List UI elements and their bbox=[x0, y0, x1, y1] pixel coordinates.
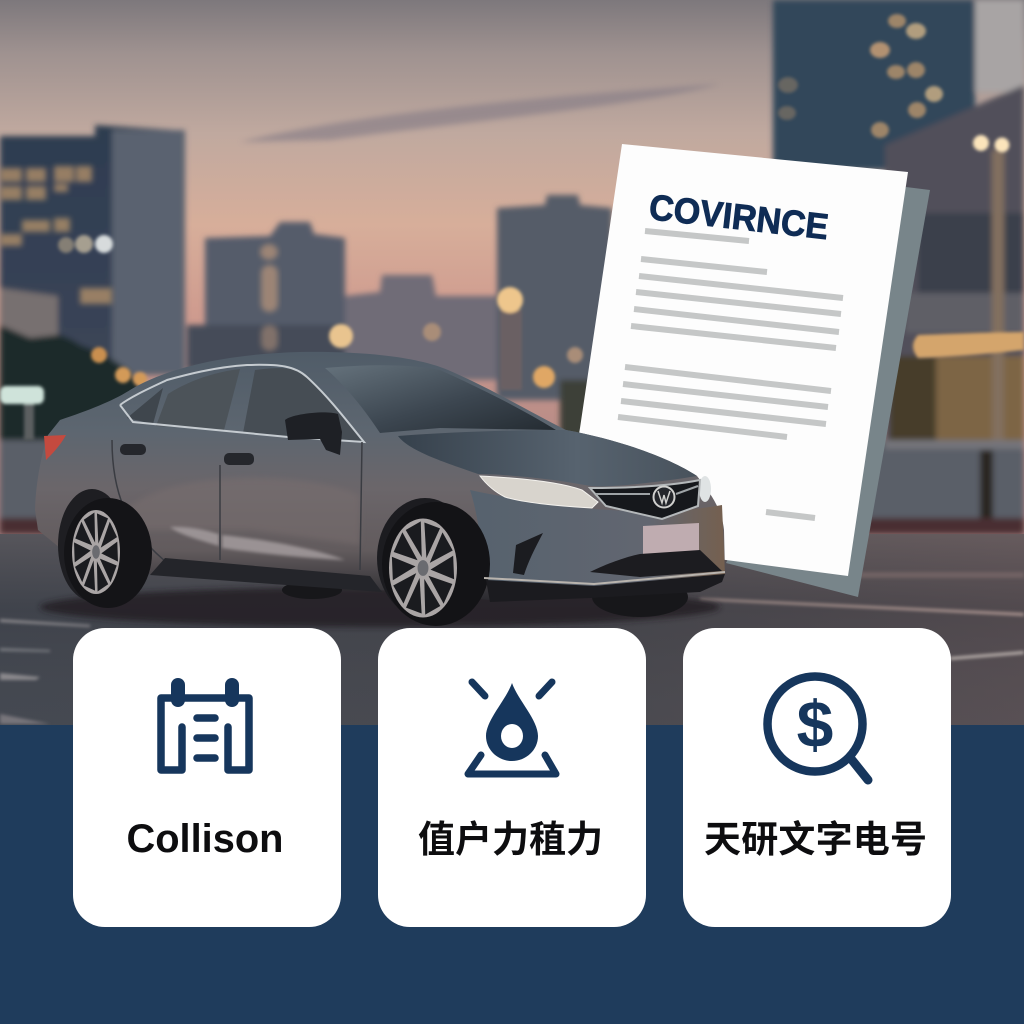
side sill bbox=[150, 558, 382, 592]
taillight bbox=[44, 435, 66, 460]
far wheels bbox=[592, 577, 688, 617]
door panel reflection bbox=[125, 478, 360, 545]
document text lines bbox=[618, 231, 843, 518]
bokeh street lights bbox=[0, 287, 583, 440]
building: right upper wall bbox=[975, 0, 1024, 92]
lit windows left bbox=[0, 166, 112, 304]
building: tower right bbox=[773, 0, 975, 170]
ground shading bbox=[0, 534, 1024, 726]
card background bbox=[73, 628, 341, 927]
panel: cost card bbox=[683, 628, 951, 927]
card background bbox=[378, 628, 646, 927]
wheel arch bbox=[377, 498, 473, 618]
background: dusk city scene bbox=[0, 0, 1024, 726]
car bbox=[35, 352, 725, 627]
document title: COVIRNCE bbox=[647, 186, 831, 247]
rear wheel bbox=[58, 489, 152, 608]
left building lower bbox=[0, 288, 58, 338]
hood bbox=[398, 430, 697, 486]
lower grille bbox=[590, 550, 722, 577]
side air intake bbox=[513, 533, 543, 575]
front side window bbox=[243, 368, 362, 441]
rear side window bbox=[156, 369, 240, 430]
coverage document bbox=[560, 144, 930, 597]
wispy cloud bbox=[240, 84, 720, 142]
building: centre bbox=[497, 195, 612, 400]
tire bbox=[64, 498, 152, 608]
building: mid low bbox=[345, 275, 500, 380]
building: middle bbox=[205, 222, 345, 355]
license plate bbox=[643, 523, 699, 554]
car body bbox=[35, 352, 725, 600]
dark window band bbox=[918, 213, 1024, 293]
sky bbox=[0, 0, 1024, 535]
wheel arch bbox=[58, 489, 126, 601]
light band bbox=[905, 293, 1024, 333]
building: low annex bbox=[187, 325, 345, 370]
window chrome bbox=[120, 365, 364, 442]
headlight bbox=[480, 476, 598, 508]
badge mark bbox=[658, 491, 670, 503]
lens bbox=[768, 676, 862, 772]
blurred skyline bbox=[0, 0, 1024, 534]
ground shadow bbox=[40, 587, 720, 627]
drop bbox=[486, 683, 538, 761]
wall top rail bbox=[885, 440, 1024, 449]
parking lot ground bbox=[0, 534, 1024, 726]
card label: 值户力稙力 bbox=[418, 819, 603, 860]
panel: collision card bbox=[73, 628, 341, 927]
grille bbox=[590, 480, 700, 519]
bokeh: building window bbox=[58, 235, 113, 253]
badge ring bbox=[654, 486, 674, 508]
front nose panel bbox=[470, 490, 725, 594]
sill reflections bbox=[170, 527, 345, 560]
warm interior bbox=[890, 356, 1024, 440]
icon: water drop with rays bbox=[468, 682, 556, 774]
card label: 天研文字电号 bbox=[704, 819, 927, 860]
rays and base bbox=[468, 682, 556, 774]
tire bbox=[382, 502, 490, 626]
window lights on tower bbox=[778, 14, 943, 138]
navy footer band bbox=[0, 725, 1024, 1024]
wall base bbox=[0, 518, 1024, 534]
icon: magnifier with dollar bbox=[768, 676, 868, 780]
front wheel bbox=[377, 498, 490, 626]
rim bbox=[71, 508, 121, 596]
vertical window lights bbox=[260, 244, 278, 351]
grille bar bbox=[596, 486, 698, 494]
card background bbox=[683, 628, 951, 927]
side mirror bbox=[285, 412, 342, 455]
door seam lines bbox=[112, 440, 362, 570]
lamp post bbox=[992, 150, 1004, 440]
badge bbox=[654, 486, 674, 508]
bumper underside bbox=[486, 574, 725, 602]
handle bbox=[852, 760, 868, 780]
building: far left bbox=[0, 125, 185, 372]
front door handle bbox=[224, 453, 254, 465]
wall bbox=[0, 440, 1024, 520]
pavement light streaks bbox=[0, 572, 1024, 724]
rear quarter window bbox=[127, 388, 163, 424]
panel: water damage card bbox=[378, 628, 646, 927]
rim bbox=[388, 517, 458, 619]
icon: calendar bbox=[161, 685, 249, 770]
windshield bbox=[325, 365, 556, 433]
rear door handle bbox=[120, 444, 146, 455]
right headlight bbox=[699, 476, 711, 502]
warm awning bbox=[913, 332, 1024, 358]
building: right low block bbox=[885, 85, 1024, 440]
front lip bbox=[484, 572, 725, 584]
trees bbox=[0, 322, 140, 445]
lamp light bbox=[973, 135, 1010, 152]
card label: Collison bbox=[126, 817, 284, 861]
document page bbox=[560, 144, 908, 576]
document back sheet bbox=[726, 187, 930, 597]
building: far left bright side bbox=[112, 130, 185, 375]
dollar sign: $ bbox=[797, 687, 833, 761]
